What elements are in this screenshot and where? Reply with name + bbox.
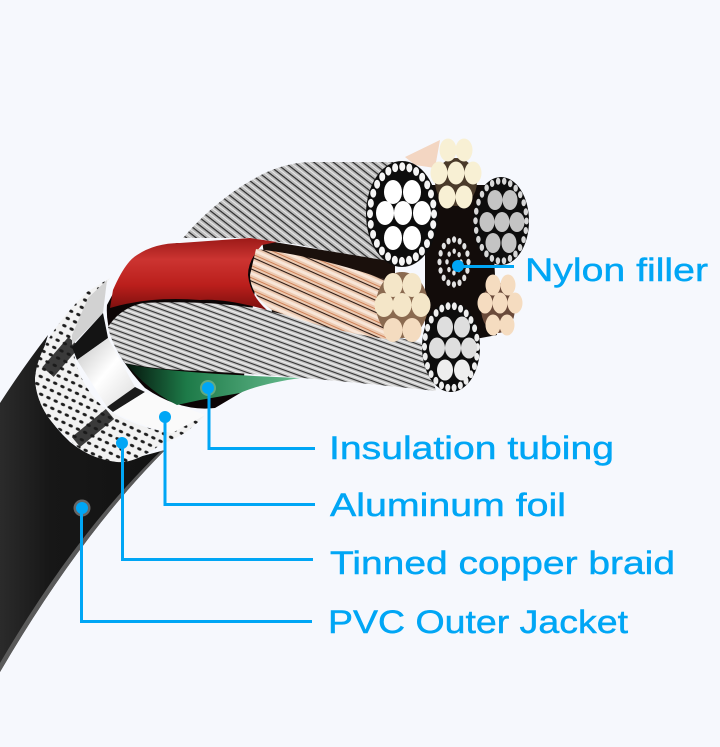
bundle: grey tinned conductor: [473, 177, 529, 265]
leader: PVC outer jacket: [74, 500, 312, 622]
PVC outer jacket: [0, 335, 165, 672]
label: Insulation tubing: Insulation tubing: [329, 430, 614, 466]
red wire insulation: [110, 238, 277, 310]
label: Nylon filler: Nylon filler: [525, 252, 708, 288]
label: Tinned copper braid: Tinned copper braid: [330, 545, 675, 581]
copper tail: [405, 140, 440, 168]
lower aluminium strands: [108, 302, 436, 391]
upper aluminium strands: [183, 162, 395, 265]
aluminum foil: [72, 280, 205, 433]
copper strands: [250, 249, 392, 340]
dark interior behind copper: [262, 240, 395, 335]
label: PVC Outer Jacket: PVC Outer Jacket: [328, 604, 628, 640]
leader: Aluminum foil: [159, 411, 315, 504]
bundle: cream conductor top: [430, 138, 482, 208]
cable opening: [107, 243, 260, 409]
bundle: lower conductor: [422, 302, 480, 392]
bundle: peach conductor right: [478, 274, 522, 336]
leader: Tinned copper braid: [116, 437, 313, 560]
conductor core dark: [425, 185, 497, 340]
leader: Nylon filler: [452, 260, 514, 272]
bundle: white tinned conductor: [366, 161, 438, 267]
nylon filler strands: [440, 240, 468, 284]
leader: Insulation tubing: [200, 380, 315, 448]
tinned copper braid: [35, 278, 205, 462]
label: Aluminum foil: Aluminum foil: [330, 487, 566, 523]
insulation tubing: green: [125, 363, 300, 405]
bundle: cream conductor left: [374, 272, 430, 342]
